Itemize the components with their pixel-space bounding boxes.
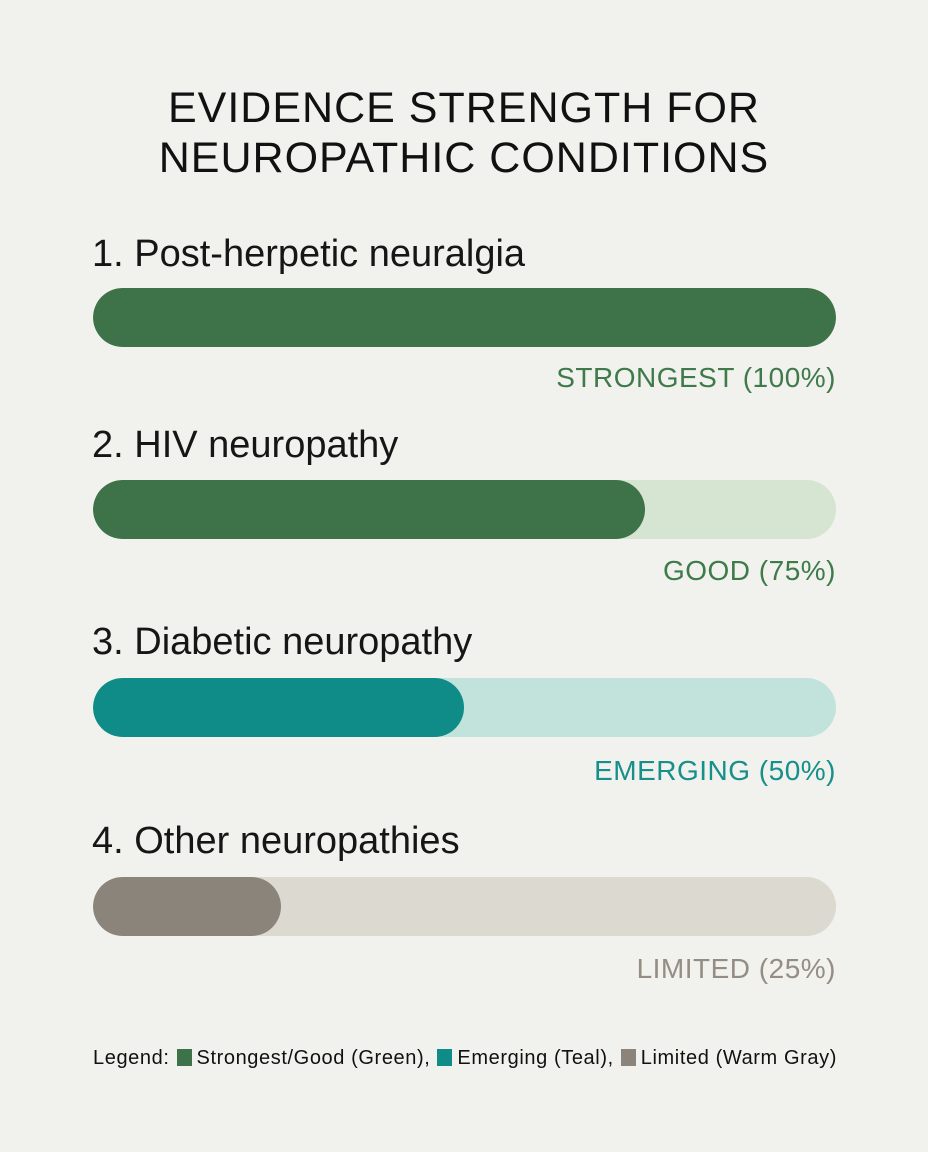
title: EVIDENCE STRENGTH FOR bbox=[168, 84, 760, 132]
item 2 label: 2. HIV neuropathy bbox=[92, 424, 398, 466]
item 4 label: 4. Other neuropathies bbox=[92, 820, 460, 862]
item 2 status: GOOD (75%) bbox=[663, 555, 836, 586]
item 3 label: 3. Diabetic neuropathy bbox=[92, 621, 472, 663]
item 4 status: LIMITED (25%) bbox=[637, 953, 836, 984]
title: NEUROPATHIC CONDITIONS bbox=[159, 134, 769, 182]
item 1 label: 1. Post-herpetic neuralgia bbox=[92, 233, 525, 275]
item 2 bar bbox=[93, 480, 836, 539]
legend: Legend: Strongest/Good (Green), Emerging (Teal), Limited (Warm Gray) bbox=[93, 1047, 837, 1069]
item 1 bar bbox=[93, 288, 836, 347]
title bbox=[159, 84, 769, 182]
item 4 bar bbox=[93, 877, 836, 936]
item 3 bar bbox=[93, 678, 836, 737]
item 1 status: STRONGEST (100%) bbox=[556, 362, 836, 393]
item 3 status: EMERGING (50%) bbox=[594, 755, 836, 786]
